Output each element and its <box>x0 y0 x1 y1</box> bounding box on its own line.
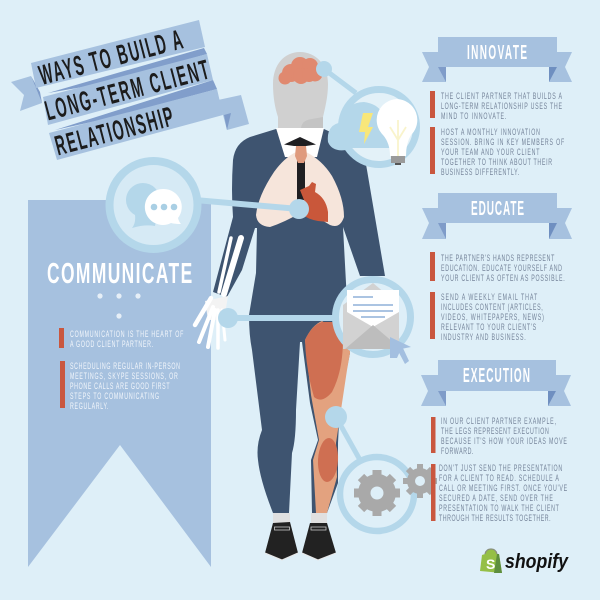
icon: shopify bag: S <box>486 556 495 572</box>
text block: innovation session: TOGETHER TO THINK ABOUT THEIR <box>441 156 552 167</box>
icon: envelope <box>336 280 411 364</box>
icon: small gear <box>403 464 437 498</box>
text block: presentation <box>431 462 567 523</box>
text block: weekly email: SEND A WEEKLY EMAIL THAT <box>441 291 537 302</box>
logo: shopify: shopify <box>505 551 569 573</box>
decorative dots <box>97 293 141 319</box>
text block: scheduling: PHONE CALLS ARE GOOD FIRST <box>70 380 170 391</box>
icon: speech bubbles <box>110 161 198 249</box>
text block: hands: YOUR CLIENT AS OFTEN AS POSSIBLE. <box>441 272 565 283</box>
text block: innovate intro: LONG-TERM RELATIONSHIP USES THE <box>441 100 562 111</box>
logo: shopify <box>480 549 569 573</box>
icon: lightning <box>359 113 373 144</box>
title banner: RELATIONSHIP <box>52 101 177 162</box>
text block: innovate intro: MIND TO INNOVATE. <box>441 110 506 121</box>
icon: light bulb <box>377 99 417 165</box>
text block: legs: BECAUSE IT'S HOW YOUR IDEAS MOVE <box>441 435 567 446</box>
banner: execution: EXECUTION <box>463 366 530 387</box>
text block: communication heart: COMMUNICATION IS THE HEART OF <box>70 328 183 339</box>
icon: gears <box>340 457 437 531</box>
banner: educate <box>422 193 572 239</box>
text block: hands: THE PARTNER'S HANDS REPRESENT <box>441 252 554 263</box>
suit upper body and arms <box>213 129 385 513</box>
text block: innovation session: HOST A MONTHLY INNOVATION <box>441 126 540 137</box>
text block: scheduling: SCHEDULING REGULAR IN-PERSON <box>70 360 180 371</box>
text block: legs: FORWARD. <box>441 445 473 456</box>
connector: leg to gears <box>325 406 360 460</box>
connector: brain to bulb <box>316 61 356 93</box>
left shoe <box>265 522 298 560</box>
text block: presentation: CALL OR MEETING FIRST. ONCE YOU'VE <box>439 482 567 493</box>
banner: innovate <box>422 37 572 82</box>
text block: innovation session <box>430 126 564 177</box>
icon: large gear <box>354 470 400 516</box>
text block: innovate intro <box>430 90 563 121</box>
heart <box>300 182 328 222</box>
text block: hands: EDUCATION. EDUCATE YOURSELF AND <box>441 262 562 273</box>
heading: communicate: COMMUNICATE <box>47 258 192 290</box>
text block: communication heart: A GOOD CLIENT PARTNER. <box>70 338 153 349</box>
text block: weekly email: RELEVANT TO YOUR CLIENT'S <box>441 321 536 332</box>
text block: innovate intro: THE CLIENT PARTNER THAT BUILDS A <box>441 90 563 101</box>
title banner <box>11 20 249 162</box>
panel: execution <box>421 360 571 523</box>
panel: innovate <box>422 37 572 177</box>
text block: legs <box>431 415 567 456</box>
right shoe <box>302 523 336 560</box>
text block: presentation: DON'T JUST SEND THE PRESENTATION <box>439 462 562 473</box>
banner: educate: EDUCATE <box>471 199 524 220</box>
socks <box>273 513 327 525</box>
text block: scheduling: STEPS TO COMMUNICATING <box>70 390 159 401</box>
connector: hand to envelope <box>218 308 340 328</box>
icon: cursor <box>390 337 411 364</box>
text block: presentation: FOR A CLIENT TO READ. SCHEDULE A <box>439 472 559 483</box>
arm bones <box>219 238 241 294</box>
text block: presentation: SECURED A DATE, SEND OVER THE <box>439 492 553 503</box>
panel: educate <box>422 193 572 342</box>
text block: legs: THE LEGS REPRESENT EXECUTION <box>441 425 549 436</box>
text block: weekly email <box>430 291 544 342</box>
text block: scheduling: MEETINGS, SKYPE SESSIONS, OR <box>70 370 178 381</box>
connector: heart to speech circle <box>195 197 309 219</box>
lungs <box>256 152 344 227</box>
brain <box>278 57 322 84</box>
text block: scheduling <box>60 360 180 411</box>
text block: communication heart <box>59 328 183 349</box>
text block: innovation session: SESSION. BRING IN KEY MEMBERS OF <box>441 136 564 147</box>
collar <box>276 128 324 157</box>
head <box>273 52 328 128</box>
text block: presentation: PRESENTATION TO WALK THE CLIENT <box>439 502 559 513</box>
text block: innovation session: YOUR TEAM AND YOUR CLIENT <box>441 146 540 157</box>
text block: presentation: THROUGH THE RESULTS TOGETHER. <box>439 512 551 523</box>
skeleton hand <box>195 296 228 348</box>
tie <box>284 137 316 200</box>
text block: scheduling: REGULARLY. <box>70 400 108 411</box>
banner: execution <box>421 360 571 406</box>
banner: innovate: INNOVATE <box>467 43 527 64</box>
panel: communicate <box>28 200 211 567</box>
text block: legs: IN OUR CLIENT PARTNER EXAMPLE, <box>441 415 556 426</box>
text block: weekly email: INDUSTRY AND BUSINESS. <box>441 331 526 342</box>
title banner: WAYS TO BUILD A <box>36 23 186 91</box>
text block: weekly email: VIDEOS, WHITEPAPERS, NEWS) <box>441 311 544 322</box>
text block: weekly email: INCLUDES CONTENT (ARTICLES, <box>441 301 543 312</box>
exposed leg <box>305 321 350 513</box>
icon: bulb and cloud <box>328 90 417 165</box>
text block: hands <box>430 252 565 283</box>
calf muscle <box>317 438 339 482</box>
human figure <box>195 52 385 560</box>
thigh muscle <box>305 322 343 400</box>
text block: innovation session: BUSINESS DIFFERENTLY. <box>441 166 519 177</box>
title banner: LONG-TERM CLIENT <box>42 54 212 127</box>
